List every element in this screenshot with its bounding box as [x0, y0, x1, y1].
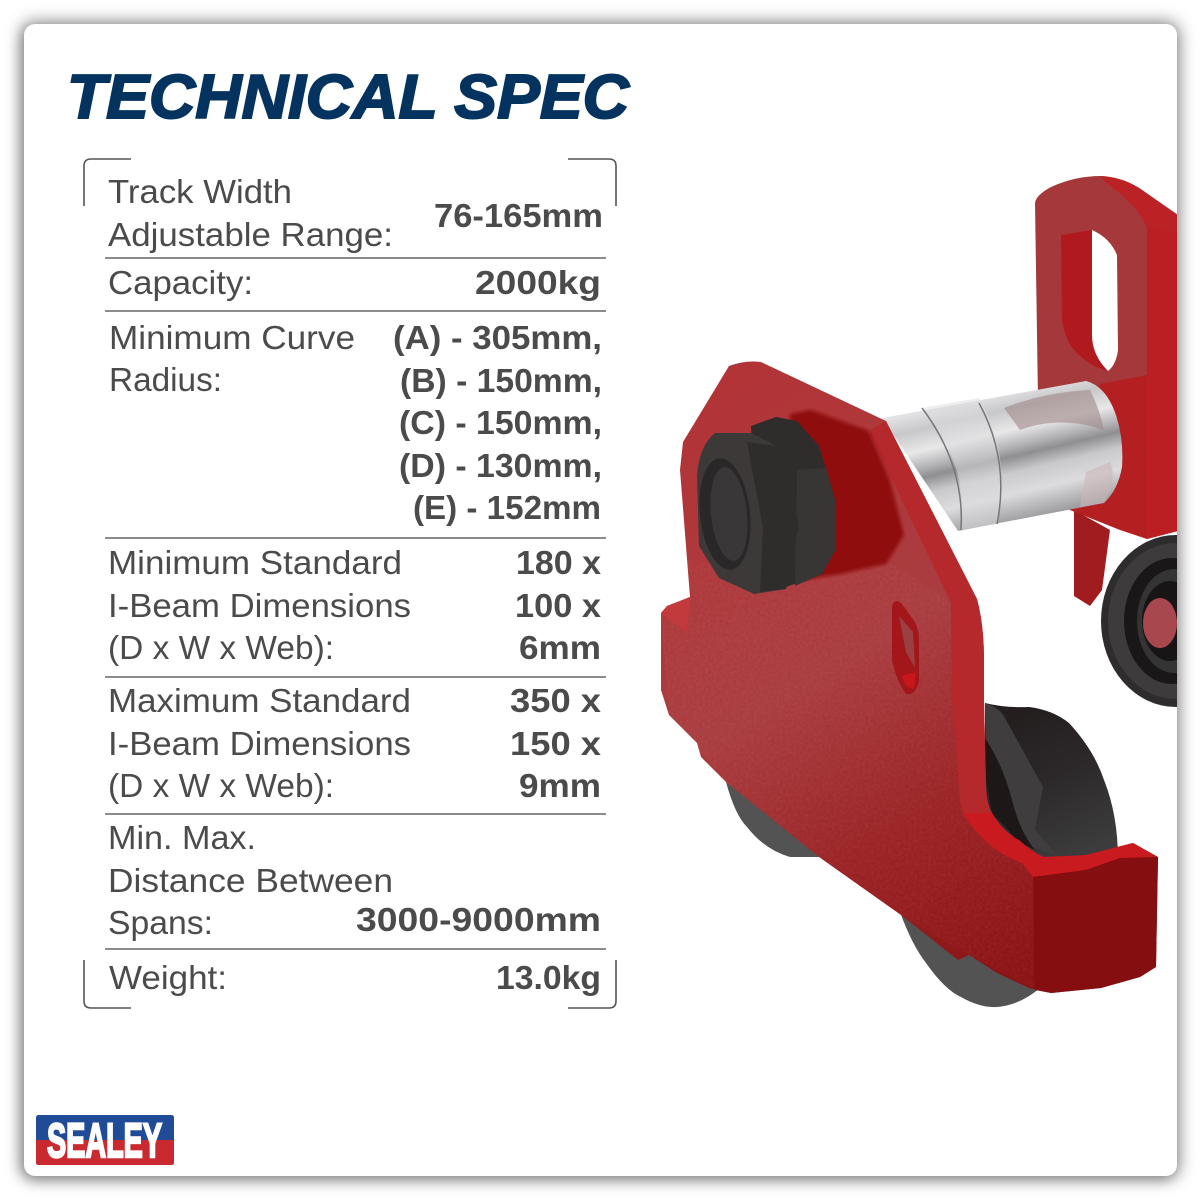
row: maximum standard I-beam: (D x W x Web):: [108, 767, 334, 804]
row: minimum standard I-beam: 100 x: [515, 587, 602, 624]
row: distance between spans: [108, 819, 601, 941]
foot ledge highlight: [963, 813, 1158, 877]
row: capacity: [108, 264, 601, 301]
row: distance between spans: Spans:: [108, 904, 213, 941]
row: track width: Track Width: [108, 173, 292, 210]
right front wheel: [985, 703, 1118, 860]
plate left notch: [661, 597, 690, 632]
front plate: [661, 362, 1158, 993]
row: minimum curve radius: [109, 319, 602, 526]
rear wheel: [1101, 535, 1177, 707]
title: TECHNICAL SPEC: [67, 63, 630, 132]
row: maximum standard I-beam: I-Beam Dimensions: [108, 725, 411, 762]
rear plate bevel: [1101, 176, 1178, 232]
row: minimum curve radius: Minimum Curve: [109, 319, 355, 356]
rear plate with slot: [1035, 176, 1178, 539]
product photo: beam trolley: [661, 176, 1200, 1007]
nut facet: [747, 442, 799, 592]
nut and bolt: [694, 417, 836, 594]
row: track width: 76-165mm: [434, 197, 603, 234]
steel shaft: [882, 381, 1122, 531]
row: minimum standard I-beam: Minimum Standard: [108, 544, 402, 581]
row: distance between spans: Distance Between: [108, 862, 393, 899]
row: minimum standard I-beam: 6mm: [519, 629, 601, 666]
row: minimum standard I-beam: 180 x: [516, 544, 602, 581]
row: weight: [109, 959, 601, 996]
row: minimum curve radius: (C) - 150mm,: [399, 404, 602, 441]
row: track width: [108, 173, 603, 253]
row: minimum curve radius: (D) - 130mm,: [399, 447, 602, 484]
row: weight: 13.0kg: [496, 959, 601, 996]
row: minimum standard I-beam: [108, 544, 602, 666]
row: track width: Adjustable Range:: [108, 216, 393, 253]
specification table: [84, 159, 616, 1008]
paint patch behind nut: [790, 410, 904, 582]
slot inner wall: [1061, 230, 1108, 371]
table corner brackets: [84, 159, 616, 1008]
row: minimum curve radius: (E) - 152mm: [413, 489, 601, 526]
row: minimum curve radius: (B) - 150mm,: [400, 362, 602, 399]
Sealey logo: [36, 1115, 174, 1168]
row: maximum standard I-beam: 9mm: [519, 767, 601, 804]
row: distance between spans: 3000-9000mm: [356, 901, 601, 938]
row: capacity: 2000kg: [475, 264, 601, 301]
row: capacity: Capacity:: [108, 264, 253, 301]
row: minimum curve radius: Radius:: [109, 361, 222, 398]
Sealey logo: SEALEY: [47, 1115, 162, 1168]
row: maximum standard I-beam: [108, 682, 602, 804]
slot opening: [1092, 230, 1118, 371]
row: maximum standard I-beam: 350 x: [510, 682, 602, 719]
row: minimum standard I-beam: (D x W x Web):: [108, 629, 334, 666]
wheel flange: [985, 703, 1044, 846]
bolt end: [700, 458, 750, 570]
rear lower plate: [1074, 510, 1110, 606]
bottom wheels: [726, 782, 1040, 1007]
plate surface texture: [661, 560, 1033, 988]
row: weight: Weight:: [109, 959, 227, 996]
row: minimum standard I-beam: I-Beam Dimensions: [108, 587, 411, 624]
plate slot: [892, 601, 919, 694]
row: maximum standard I-beam: 150 x: [510, 725, 602, 762]
row: maximum standard I-beam: Maximum Standard: [108, 682, 411, 719]
foot end face: [1033, 857, 1158, 993]
row: distance between spans: Min. Max.: [108, 819, 256, 856]
plate bevel edge: [869, 421, 992, 813]
row: minimum curve radius: (A) - 305mm,: [393, 319, 602, 356]
